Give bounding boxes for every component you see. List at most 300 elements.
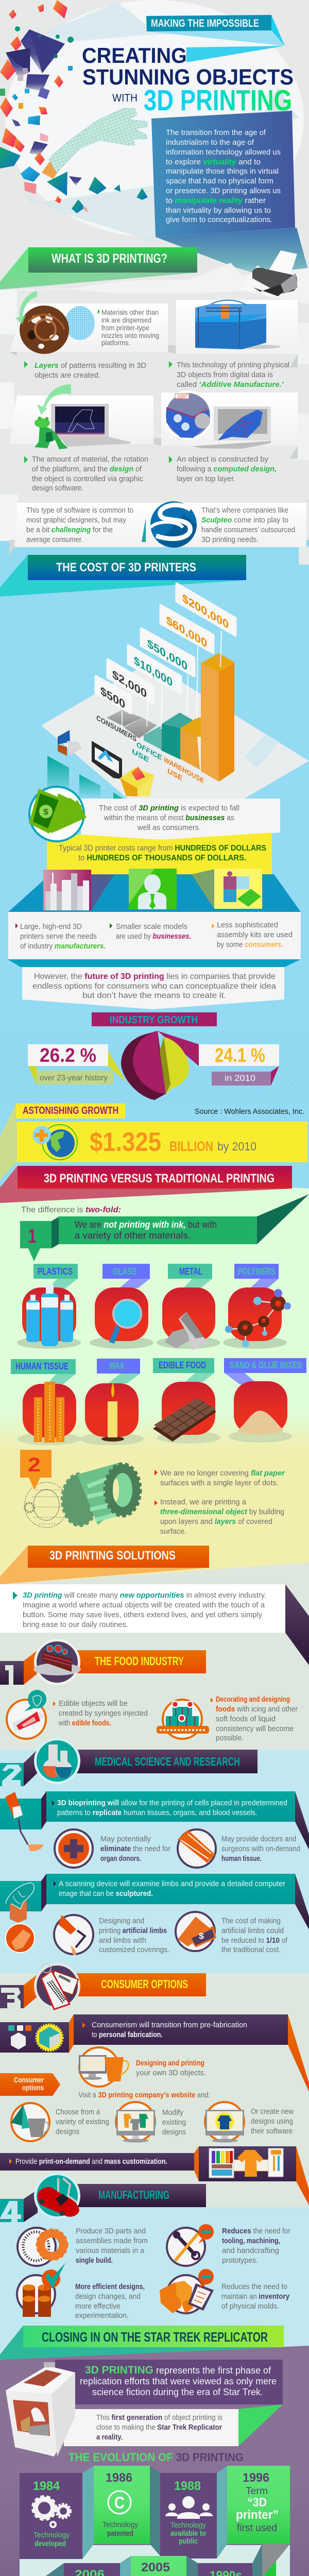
text <box>56 2108 109 2136</box>
ribbon: point 1 materials: a variety of other materials. <box>75 1230 191 1241</box>
panel: introduction: information technology allowed us <box>166 148 281 157</box>
stat: 26.2 percent: 26.2 % <box>40 1045 96 1066</box>
text: decorating foods: Decorating and designing <box>216 1695 290 1704</box>
text: manufacturers: printers serve the needs <box>20 932 97 941</box>
heading: 2 medical science and research <box>0 1738 258 1786</box>
stat: 24.1 percent: in 2010 <box>225 1073 255 1083</box>
panel: laptop with frog <box>9 384 161 449</box>
material: human tissue: HUMAN TISSUE <box>15 1361 68 1371</box>
material: wax: WAX <box>109 1361 124 1371</box>
panel: three user tiers <box>8 869 301 912</box>
text right: 3D printing needs. <box>201 535 259 544</box>
icon: artificial limb circle <box>54 1915 93 1955</box>
timeline: 1986 <box>94 2466 160 2556</box>
decorative mesh fans behind the header <box>23 2 299 242</box>
panel: yellow cost range: Typical 3D printer costs range from HUNDREDS OF DOLLARS <box>59 844 266 853</box>
text: consumers: assembly kits are used <box>217 930 293 939</box>
timeline: 1996: 1996 <box>243 2471 269 2485</box>
price tag $60,000 <box>161 605 213 653</box>
header banner: making the impossible <box>146 15 285 62</box>
heading: 3d printing solutions <box>0 1546 209 1584</box>
heading: 3 consumer options: CONSUMER OPTIONS <box>101 1977 188 1991</box>
text: designing and printing: Designing and printing <box>136 2059 204 2067</box>
heading: closing in on the star trek replicator <box>0 2326 284 2360</box>
text: three-dimensional object: upon layers and layers of covered <box>160 1517 272 1526</box>
timeline panel background <box>11 2544 296 2576</box>
price tag $200,000 <box>177 584 235 635</box>
text: designing and printing: your own 3D objects. <box>136 2069 206 2077</box>
stat: 24.1 percent <box>199 1044 279 1086</box>
chart: isometric printer cost bars <box>41 584 309 839</box>
text: Reduces the need to <box>221 2282 287 2291</box>
panel: star trek intro: science fiction during the era of Star Trek. <box>92 2387 263 2397</box>
text <box>222 2227 290 2265</box>
text: source: Source : Wohlers Associates, Inc. <box>195 1107 304 1116</box>
figure: $1.325 <box>90 1127 161 1157</box>
text: amount of material: the object is controlled via graphic <box>32 474 143 483</box>
panel: bioprinting: 3D bioprinting will allow for the printing of cells placed in predetermined <box>57 1799 287 1807</box>
panel: introduction <box>151 111 309 289</box>
panel: yellow cost range: to HUNDREDS OF THOUSANDS OF DOLLARS. <box>78 854 246 862</box>
panel: future of 3d printing: but don’t have the means to create it. <box>82 991 226 1000</box>
panel: new opportunities: bring ease to our daily routines. <box>23 1620 128 1629</box>
axis labels: USE <box>167 767 183 783</box>
panel: cost expected to fall: well as consumers. <box>137 823 201 832</box>
text: amount of material: The amount of material, the rotation <box>32 455 148 464</box>
text <box>75 2282 145 2320</box>
text: edible objects: with edible foods. <box>58 1719 111 1727</box>
timeline: 2005 <box>131 2556 198 2576</box>
item: reduces tooling <box>167 2224 290 2266</box>
text: designs <box>56 2127 79 2136</box>
panel: introduction: give form to conceptualizations. <box>166 215 272 224</box>
panel: introduction: to manipulate reality rather <box>166 196 266 205</box>
text: additive manufacture <box>169 361 289 389</box>
panel: laptop with bracket <box>161 391 298 449</box>
icon: human tissue circle <box>178 1829 216 1868</box>
text: computed design <box>169 455 277 483</box>
text: manufacturers: of industry manufacturers. <box>20 942 106 951</box>
material: plastics <box>17 1264 81 1349</box>
stat: 26.2 percent <box>28 1044 113 1084</box>
figure: by 2010 <box>217 1140 256 1153</box>
icon: cube customizer <box>8 2025 62 2050</box>
material: plastics: PLASTICS <box>38 1266 73 1277</box>
icon: globe <box>32 1125 77 1160</box>
text: layers of patterns: Layers of patterns resulting in 3D <box>35 361 146 370</box>
text: businesses: Smaller scale models <box>116 922 187 931</box>
panel: print on demand <box>0 2146 309 2205</box>
icon: dollar bills circle: $ <box>199 1932 204 1941</box>
text: decorating foods: consistency will become <box>216 1724 294 1733</box>
chart floor <box>41 662 309 839</box>
icon: green money in circle: $ <box>43 808 48 817</box>
heading: 3d printing solutions: 3D PRINTING SOLUTIONS <box>49 1549 176 1563</box>
icon: copyright: C <box>114 2493 125 2512</box>
text: layers of patterns <box>24 361 146 380</box>
panel: star trek intro: replication efforts that were viewed as only mere <box>80 2376 277 2386</box>
bullet text: from printer-type <box>101 324 149 332</box>
text <box>76 2227 148 2265</box>
text <box>251 2107 294 2136</box>
heading: industry growth <box>92 1012 217 1026</box>
icon: chocolate bar <box>153 1398 216 1442</box>
text: amount of material: design software. <box>32 484 83 493</box>
heading: the cost of 3d printers <box>0 555 246 597</box>
heading: 4 manufacturing <box>0 2173 206 2222</box>
bars <box>107 653 280 782</box>
arrow: green curve <box>37 384 71 415</box>
text: designs using <box>251 2117 293 2126</box>
timeline: 1990s <box>198 2563 252 2576</box>
icon: magnified detail circle: 220° <box>178 394 187 400</box>
text right <box>201 506 295 544</box>
panel: cost expected to fall <box>81 799 280 840</box>
text: cost of limbs: artificial limbs could <box>221 1926 284 1935</box>
panel: first generation: a reality. <box>96 2433 123 2442</box>
text: assemblies made from <box>76 2236 148 2245</box>
text: cost of limbs: the traditional cost. <box>221 1945 281 1954</box>
timeline: 2005: 2005 <box>141 2561 170 2574</box>
icon: boxes and clipboard <box>160 2269 214 2313</box>
text: additive manufacture: This technology of printing physical <box>177 361 289 369</box>
text right: Sculpteo come into play to <box>201 516 288 524</box>
icon: dollar bills circle <box>176 1912 216 1951</box>
tile: puzzle <box>192 869 262 909</box>
icon: monitor with shirts <box>116 2102 155 2142</box>
icon: syringe with strawberry <box>7 1690 46 1739</box>
text: visit website: Visit a 3D printing company’s website and: <box>78 2091 210 2099</box>
text: amount of material <box>24 455 148 493</box>
material: wax <box>80 1359 144 1445</box>
title: CREATING <box>82 43 187 67</box>
timeline: 1986: patented <box>107 2529 133 2538</box>
material: edible food: EDIBLE FOOD <box>159 1360 206 1370</box>
timeline: 1996: “3D <box>247 2496 267 2510</box>
text: their software <box>251 2127 293 2136</box>
bullet text <box>98 309 159 347</box>
text: Or create new <box>251 2107 294 2116</box>
section backdrop: zigzag white bands <box>0 263 309 541</box>
text: manufacturers <box>15 922 106 951</box>
bullet text: Materials other than <box>101 309 159 316</box>
text: and handcrafting <box>222 2246 279 2255</box>
timeline: 1984: 1984 <box>33 2479 60 2493</box>
text: additive manufacture: 3D objects from digital data is <box>177 370 273 379</box>
decorative teal prisms <box>47 756 123 799</box>
panel: star trek intro: 3D PRINTING represents the first phase of <box>85 2364 271 2376</box>
text: prototypes. <box>222 2256 258 2265</box>
title: STUNNING OBJECTS <box>82 65 294 90</box>
icon: wrench and screwdriver <box>167 2224 214 2266</box>
text left: be a bit challenging for the <box>26 526 113 534</box>
icon: copyright <box>108 2491 131 2514</box>
panel: new opportunities <box>0 1584 309 1665</box>
text: various materials in a <box>76 2246 145 2255</box>
material: glass: GLASS <box>113 1266 136 1277</box>
text: edible objects: created by syringes injected <box>59 1709 148 1718</box>
timeline: 1988: 1988 <box>174 2479 201 2493</box>
icon: medical cross circle <box>55 1829 93 1868</box>
timeline: 1986: Technology <box>102 2520 138 2529</box>
timeline: 1988: Technology <box>170 2521 206 2530</box>
text: businesses <box>110 922 191 941</box>
timeline: 2006 <box>20 2556 131 2576</box>
heading: what is 3d printing <box>0 247 197 290</box>
posts <box>122 631 221 729</box>
panel: future of 3d printing: endless options for consumers who can conceptualize their idea <box>32 982 276 991</box>
text: Reduces the need for <box>222 2227 290 2235</box>
title <box>82 43 294 117</box>
text: on-demand tissue: May provide doctors and <box>221 1835 296 1843</box>
tile: industry buildings <box>43 870 114 910</box>
heading: 1 the food industry: THE FOOD INDUSTRY <box>95 1654 184 1668</box>
text: three-dimensional object: Instead, we are printing a <box>160 1498 247 1506</box>
icon: sand pile <box>237 1411 284 1434</box>
icon: magnified detail circle <box>163 391 213 440</box>
timeline: 1984: Technology <box>33 2531 70 2539</box>
icon: green frog <box>35 416 68 449</box>
material: edible food <box>153 1358 220 1444</box>
heading: the cost of 3d printers: THE COST OF 3D PRINTERS <box>56 561 196 574</box>
ribbon: point 1 materials <box>20 1194 309 1261</box>
tile: business person <box>129 869 177 909</box>
icon: tissue columns <box>34 1382 64 1443</box>
text left: most graphic designers, but may <box>26 516 126 524</box>
panel: cost expected to fall: within the means of most businesses as <box>104 814 234 822</box>
text: computed design: An object is constructed by <box>177 455 268 464</box>
text: cost of limbs: be reduced to 1/10 of <box>221 1936 288 1945</box>
title: WITH <box>112 92 138 104</box>
axis labels <box>96 714 204 786</box>
icon: wireframe and solid gears <box>25 1462 140 1528</box>
material: sand and glue mixes <box>224 1358 306 1443</box>
text: experimentation. <box>75 2311 129 2320</box>
text: Choose from a <box>56 2108 100 2116</box>
icon: scanned hand <box>6 1883 35 1953</box>
text: edible objects <box>53 1699 148 1727</box>
heading: 4 manufacturing: MANUFACTURING <box>98 2188 169 2201</box>
bullet text: nozzles onto moving <box>101 332 159 340</box>
text: organ donors: May potentially <box>100 1835 151 1843</box>
material: metal: METAL <box>179 1266 202 1277</box>
text: three-dimensional object <box>154 1498 284 1536</box>
text: design changes, and <box>75 2292 141 2301</box>
text: artificial limbs: and limbs with <box>99 1936 146 1945</box>
arrow: green curve <box>15 291 37 325</box>
text: organ donors: organ donors. <box>100 1854 141 1863</box>
text: three-dimensional object: surface. <box>160 1527 186 1536</box>
item: efficient designs <box>17 2263 145 2320</box>
panel: introduction: space that had no physical form <box>166 177 273 185</box>
text: artificial limbs: printing artificial limbs <box>99 1926 167 1935</box>
icon: white desktop 3d printer <box>6 2362 75 2456</box>
panel: introduction: to explore virtuality and to <box>166 158 261 166</box>
panel: bioprinting: patterns to replicate human tissues, organs, and blood vessels. <box>57 1808 258 1817</box>
text: flat paper surfaces: We are no longer covering flat paper <box>160 1469 285 1478</box>
panel: bioprinting <box>0 1791 309 1850</box>
icon: robot arm with red car <box>34 2173 80 2219</box>
panel: introduction: manipulate those things in virtual <box>166 167 279 176</box>
panel: star trek intro <box>55 2360 283 2404</box>
text: artificial limbs: Designing and <box>99 1917 144 1925</box>
icon: desktop printer <box>237 250 298 296</box>
material: polymers <box>223 1264 291 1349</box>
icon: prosthetic leg <box>5 1792 43 1851</box>
timeline: 1996: first used <box>237 2522 277 2534</box>
text: manufacturers: Large, high-end 3D <box>20 922 82 931</box>
text: on-demand tissue <box>221 1835 300 1863</box>
ribbon: point 2 gears <box>20 1450 140 1528</box>
text: single build. <box>76 2256 113 2265</box>
text: difference is two-fold: The difference is two-fold: <box>21 1206 121 1214</box>
material: glass <box>90 1264 153 1349</box>
heading: 1 the food industry <box>0 1639 206 1685</box>
timeline: 1996: Term <box>246 2486 268 2497</box>
option: choose designs <box>11 2103 109 2141</box>
icon: monitor with star shirt <box>205 2102 244 2142</box>
panel: first generation <box>64 2404 283 2446</box>
heading: 2 medical science and research: MEDICAL SCIENCE AND RESEARCH <box>95 1755 240 1768</box>
text: more effective <box>75 2302 121 2311</box>
timeline: 1988: public <box>179 2537 198 2546</box>
tag: consumer options: options <box>22 2083 44 2092</box>
axis labels: CONSUMERS <box>96 714 136 744</box>
panel: introduction: or presence. 3D printing allows us <box>166 187 281 195</box>
option: modify designs <box>116 2102 186 2142</box>
text: computed design: following a computed design, <box>177 465 277 473</box>
text: artificial limbs <box>99 1917 169 1954</box>
text: amount of material: of the platform, and the design of <box>32 465 142 473</box>
price tag $500 <box>96 676 131 713</box>
panel: software and sculpteo <box>9 501 309 565</box>
panel: card layers <box>9 291 176 354</box>
text left <box>26 506 133 544</box>
icon: metal ingots <box>165 1312 209 1350</box>
icon: decorated tier cake <box>157 1700 209 1739</box>
icon: puzzle pieces on chart <box>58 730 82 756</box>
icon: price tags <box>34 1963 80 2009</box>
figure <box>90 1127 256 1157</box>
bullet text: ink are dispensed <box>101 316 151 324</box>
text: artificial limbs: customized coverings. <box>99 1945 169 1954</box>
text: flat paper surfaces: surfaces with a single layer of dots. <box>160 1479 279 1487</box>
heading: 3 consumer options <box>0 1963 206 2009</box>
tag: consumer options: Consumer <box>14 2076 44 2084</box>
text right: handle consumers’ outsourced <box>201 526 295 534</box>
text: Produce 3D parts and <box>76 2227 146 2235</box>
panel: future of 3d printing: However, the future of 3D printing lies in companies that provide <box>34 972 276 981</box>
text: layers of patterns: objects are created. <box>35 371 100 380</box>
text right: That’s where companies like <box>201 506 288 515</box>
text: computed design: layer on top layer. <box>177 474 235 483</box>
text: cost of limbs <box>221 1917 288 1954</box>
ribbon: point 2 gears: 2 <box>28 1454 41 1476</box>
text <box>221 2282 290 2311</box>
icon: green money in circle <box>29 787 87 841</box>
heading: astonishing growth: ASTONISHING GROWTH <box>23 1105 118 1116</box>
axis labels: USE <box>132 747 149 765</box>
heading: what is 3d printing: WHAT IS 3D PRINTING? <box>52 251 167 266</box>
icon: yellow box of crystals <box>120 767 154 796</box>
timeline: 1996 <box>227 2466 290 2544</box>
icon: palette, shirt and sliders <box>209 2148 283 2178</box>
text: of physical molds. <box>221 2302 279 2311</box>
text: three-dimensional object: three-dimensional object by building <box>160 1507 284 1516</box>
text: decorating foods: soft foods of liquid <box>216 1715 276 1723</box>
text: flat paper surfaces <box>154 1469 285 1487</box>
timeline: 1984: developed <box>35 2539 66 2548</box>
text: organ donors <box>100 1835 170 1863</box>
icon: bottles <box>26 1284 73 1346</box>
text <box>162 2108 186 2137</box>
text: designing and printing <box>136 2059 206 2077</box>
text: cost of limbs: The cost of making <box>221 1917 281 1925</box>
text: organ donors: eliminate the need for <box>100 1844 170 1853</box>
price tag $10,000: $10,000 <box>134 654 173 690</box>
text: edible objects: Edible objects will be <box>59 1699 128 1708</box>
text: decorating foods: foods with icing and other <box>216 1705 298 1714</box>
icon: gears <box>33 2497 71 2527</box>
price tag $50,000 <box>141 629 194 676</box>
timeline: 1996: printer” <box>236 2508 279 2522</box>
icon: monitor on chart <box>92 741 122 779</box>
icon: wireframe hand <box>49 108 147 173</box>
floating crystals <box>0 0 148 213</box>
text: on-demand tissue: surgeons with on-demand <box>221 1844 300 1853</box>
text: decorating foods: possible. <box>216 1734 244 1742</box>
timeline: 1988 <box>160 2466 227 2558</box>
ribbon: point 1 materials: 1 <box>28 1226 37 1247</box>
text left: This type of software is common to <box>26 506 133 515</box>
price tag $60,000: $60,000 <box>166 614 207 651</box>
tag: consumer options <box>0 2073 60 2096</box>
icon: laptop bracket <box>193 406 271 449</box>
panel: new opportunities: 3D printing will create many new opportunities in almost every industry. <box>23 1591 266 1600</box>
panel: introduction: than virtuality by allowing us to <box>166 206 271 215</box>
axis labels: WAREHOUSE <box>164 755 204 786</box>
panel: tier descriptions <box>8 912 301 967</box>
icon: printed cylinders with check <box>17 2263 65 2317</box>
heading: 3d printing versus traditional printing <box>0 1166 292 1203</box>
logo: sculpteo <box>150 501 197 548</box>
figure: BILLION <box>169 1139 213 1154</box>
text: decorating foods <box>211 1695 298 1742</box>
icon: cake slice <box>33 1639 81 1685</box>
panel: first generation: close to making the Star Trek Replicator <box>96 2423 222 2432</box>
text: maintain an inventory <box>221 2292 290 2301</box>
bullet text: platforms. <box>101 339 130 347</box>
item: parts in single build <box>18 2227 148 2266</box>
icon: laptop <box>51 404 130 447</box>
axis labels: OFFICE <box>136 740 162 762</box>
panel: new opportunities: button. Some may save lives, others extend lives, and yet others simply <box>23 1611 262 1619</box>
price tag $2,000: $2,000 <box>112 668 147 701</box>
panel: 1.325 billion <box>17 1122 307 1162</box>
panel: consumerism transition: Consumerism will transition from pre-fabrication <box>92 2021 247 2029</box>
option: create designs <box>205 2102 294 2142</box>
timeline: 1986: 1986 <box>106 2471 132 2485</box>
text: consumers: Less sophisticated <box>217 921 278 929</box>
panel: scanning device: image that can be sculptured. <box>59 1889 153 1898</box>
icon: monitor and mug <box>79 2047 129 2087</box>
text: businesses: are used by businesses. <box>116 932 191 941</box>
panel: first generation: This first generation of object printing is <box>96 2413 222 2422</box>
panel: cost expected to fall: The cost of 3D printing is expected to fall <box>99 804 239 812</box>
price tag $2,000 <box>108 659 153 703</box>
material: metal <box>157 1264 220 1350</box>
timeline: 1988: available to <box>170 2529 206 2538</box>
